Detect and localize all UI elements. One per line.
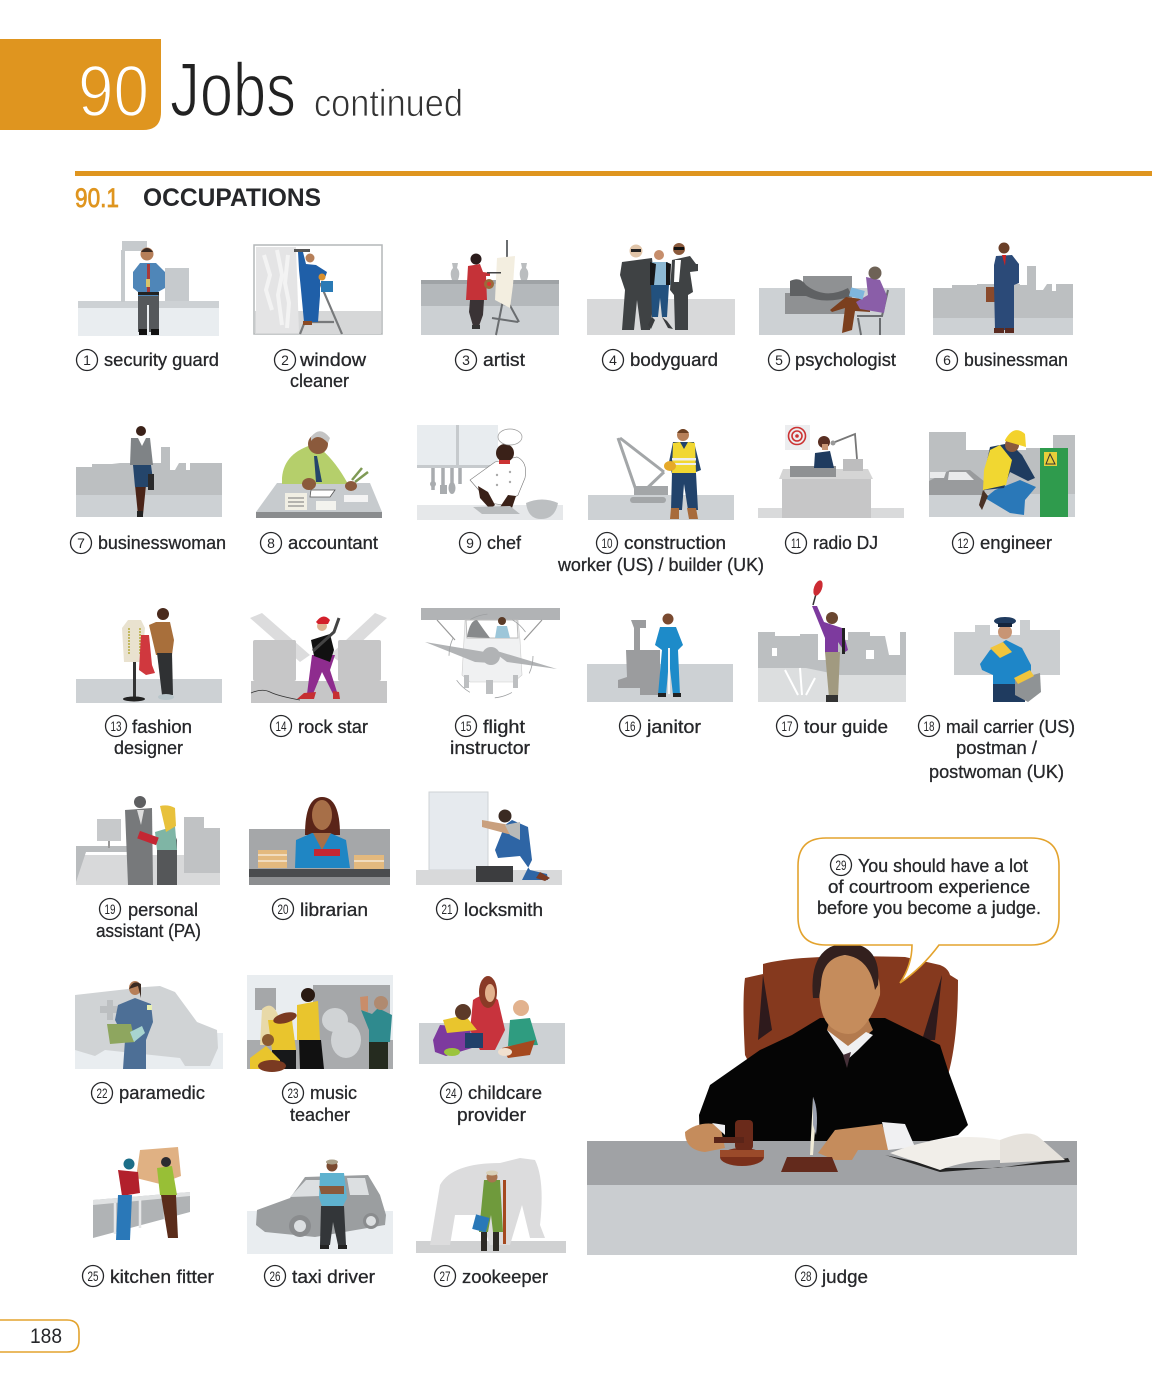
label: childcare provider: childcare: [468, 1082, 542, 1103]
panel: bodyguard: [587, 243, 735, 335]
panel: zookeeper: [416, 1158, 566, 1253]
label: psychologist: 5: [775, 352, 783, 368]
label: librarian: [272, 898, 368, 920]
scene: desk: [587, 1141, 1077, 1255]
icon: green electrical cabinet: [1040, 448, 1068, 517]
figure: designer with mannequin: [122, 608, 174, 702]
panel: childcare provider: [419, 976, 565, 1064]
callout: speech bubble: You should have a lot: [858, 855, 1028, 876]
scene: checkpoint: [78, 241, 219, 336]
icon: on-air sign: [785, 425, 810, 450]
page number: [0, 1320, 79, 1352]
figure: mail carrier: [980, 617, 1041, 702]
figure: students and teacher: [250, 988, 392, 1072]
panel: window cleaner: [254, 245, 382, 334]
label: locksmith: locksmith: [464, 899, 543, 920]
panel: security guard: [78, 241, 219, 336]
label: rock star: [270, 716, 368, 737]
scene: window: [254, 245, 382, 334]
panel: psychologist: [759, 266, 905, 335]
figure: janitor: [655, 614, 683, 697]
panel: tour guide: [758, 579, 906, 702]
label: fashion designer: [106, 716, 192, 758]
panel: mail carrier: [954, 617, 1060, 702]
panel: judge: [587, 943, 1077, 1255]
label: janitor: 16: [624, 718, 636, 734]
label: bodyguard: 4: [609, 352, 617, 368]
label: childcare provider: provider: [457, 1104, 526, 1125]
label: music teacher: 23: [288, 1085, 299, 1101]
figure: cleaner on ladder: [294, 249, 342, 334]
label: chef: chef: [487, 532, 522, 553]
label: tour guide: 17: [782, 718, 793, 734]
label: taxi driver: taxi driver: [292, 1266, 375, 1287]
label: psychologist: psychologist: [795, 349, 896, 370]
panel: locksmith: [416, 792, 562, 885]
label: judge: [796, 1266, 868, 1287]
label: music teacher: teacher: [290, 1104, 350, 1125]
panel: artist: [421, 240, 559, 335]
label: flight instructor: 15: [460, 718, 472, 734]
scene: room and couch: [759, 276, 905, 335]
panel: radio DJ: [758, 425, 904, 518]
label: flight instructor: [450, 716, 530, 758]
label: construction worker: construction: [624, 532, 726, 553]
label: security guard: security guard: [104, 349, 219, 370]
page number: 188: [30, 1325, 62, 1348]
figure: rock star: [297, 616, 340, 699]
scene: floor: [587, 299, 735, 335]
label: flight instructor: instructor: [450, 737, 530, 758]
chapter number tab: 90: [78, 52, 149, 132]
section heading: [75, 171, 1152, 213]
scene: floor: [76, 679, 222, 703]
icon: mixing bowl: [526, 500, 558, 519]
figure: businesswoman: [130, 426, 154, 517]
label: businesswoman: businesswoman: [98, 532, 226, 553]
title: continued: [314, 83, 463, 125]
label: artist: artist: [483, 349, 525, 370]
label: librarian: 20: [278, 901, 289, 917]
label: fashion designer: 13: [110, 718, 122, 734]
label: window cleaner: 2: [281, 352, 289, 368]
label: childcare provider: 24: [446, 1085, 457, 1101]
scene: site with crane: [588, 438, 734, 520]
label: mail carrier: postwoman (UK): [929, 761, 1064, 782]
panel: rock star: [250, 613, 387, 703]
figure: artist at easel: [466, 240, 519, 335]
scene: play mat: [419, 1023, 565, 1064]
papers on desk: [285, 490, 368, 510]
label: judge: judge: [821, 1266, 868, 1287]
panel: chef: [417, 425, 563, 520]
label: librarian: librarian: [300, 899, 368, 920]
figure: aircraft front view: [421, 608, 560, 698]
label: mail carrier: postman /: [956, 737, 1038, 758]
label: kitchen fitter: 25: [88, 1268, 99, 1284]
figure: judge hands and cuffs: [685, 1122, 915, 1160]
label: rock star: rock star: [298, 716, 368, 737]
label: paramedic: 22: [96, 1085, 108, 1101]
scene: studio desk: [758, 459, 904, 518]
figure: zookeeper: [472, 1170, 506, 1251]
label: radio DJ: radio DJ: [813, 532, 878, 553]
figure: client and bodyguards: [620, 243, 698, 330]
figure: tour guide with paddle: [812, 579, 848, 702]
figure: boss and assistant: [125, 796, 177, 885]
scene: stage with amps: [250, 613, 387, 703]
label: artist: [456, 349, 525, 370]
label: radio DJ: [786, 532, 878, 554]
scene: desk: [256, 483, 382, 518]
scene: floor and cleaning cart: [587, 620, 733, 702]
icon: open book: [885, 1133, 1070, 1172]
label: music teacher: [282, 1082, 357, 1125]
scene: skyline: [76, 447, 222, 517]
label: childcare provider: [440, 1082, 542, 1125]
callout: speech bubble: before you become a judge.: [817, 897, 1041, 918]
scene: door: [416, 792, 562, 885]
figure: businessman: [986, 242, 1019, 333]
label: chef: [460, 532, 522, 554]
title: Jobs: [170, 48, 296, 133]
panel: businessman: [933, 242, 1073, 335]
label: paramedic: paramedic: [119, 1082, 205, 1103]
section heading: OCCUPATIONS: [143, 184, 321, 212]
panel: flight instructor: [421, 608, 560, 698]
figure: guard: [133, 248, 165, 335]
callout: speech bubble: of courtroom experience: [828, 876, 1030, 897]
label: taxi driver: 26: [270, 1268, 281, 1284]
label: radio DJ: 11: [791, 535, 801, 551]
panel: kitchen fitter: [93, 1147, 190, 1240]
label: bodyguard: bodyguard: [630, 349, 718, 370]
scene: skyline: [933, 266, 1073, 335]
label: zookeeper: 27: [440, 1268, 451, 1284]
label: mail carrier: [918, 716, 1075, 782]
label: window cleaner: [274, 349, 367, 391]
label: businessman: 6: [943, 352, 951, 368]
figure: fitters with cabinet: [116, 1147, 181, 1240]
scene: kitchen cabinets: [93, 1192, 190, 1238]
panel: taxi driver: [247, 1160, 393, 1254]
scene: music room: [247, 975, 393, 1069]
label: personal assistant: 19: [104, 901, 116, 917]
label: zookeeper: zookeeper: [462, 1266, 548, 1287]
figure: carer and children: [433, 976, 538, 1058]
label: mail carrier: mail carrier (US): [946, 716, 1075, 737]
scene: town silhouette: [954, 620, 1060, 675]
label: janitor: [620, 716, 701, 737]
figure: judge in robe: [699, 943, 968, 1145]
label: construction worker: 10: [602, 535, 613, 551]
figure: locksmith and toolbox: [476, 810, 550, 882]
scene: office: [76, 817, 220, 885]
panel: music teacher: [247, 975, 393, 1072]
label: engineer: engineer: [980, 532, 1052, 553]
callout: speech bubble: 29: [836, 857, 847, 873]
figure: worker: [664, 429, 701, 519]
label: rock star: 14: [276, 718, 287, 734]
figure: chef: [470, 429, 526, 514]
scene: ruins: [758, 632, 906, 702]
label: chef: 9: [466, 535, 474, 551]
callout: speech bubble: [798, 838, 1059, 983]
label: judge: 28: [800, 1268, 812, 1284]
scene: street: [929, 432, 1075, 517]
label: businesswoman: 7: [77, 535, 85, 551]
scene: studio: [421, 263, 559, 335]
figure: paramedic: [107, 981, 153, 1069]
figure: psychologist: [830, 266, 888, 335]
label: flight instructor: flight: [483, 716, 525, 737]
section heading: 90.1: [75, 183, 119, 213]
scene: elephant: [416, 1158, 566, 1253]
scene: ambulance: [75, 986, 223, 1069]
panel: fashion designer: [76, 608, 222, 703]
panel: janitor: [587, 614, 733, 702]
label: fashion designer: designer: [114, 737, 183, 758]
label: window cleaner: cleaner: [290, 370, 349, 391]
label: security guard: 1: [83, 352, 91, 368]
label: construction worker: worker (US) / builder (UK): [557, 554, 764, 575]
scene: shelves: [249, 829, 390, 885]
panel: librarian: [249, 797, 390, 885]
label: janitor: janitor: [646, 716, 701, 737]
label: locksmith: 21: [442, 901, 453, 917]
label: businessman: businessman: [964, 349, 1068, 370]
panel: personal assistant: [76, 796, 220, 885]
label: artist: 3: [462, 352, 470, 368]
icon: pen stand: [781, 1097, 838, 1172]
label: accountant: 8: [267, 535, 275, 551]
figure: DJ with microphone: [814, 434, 857, 468]
figure: driver: [319, 1160, 347, 1249]
label: personal assistant: [96, 898, 201, 941]
panel: construction worker: [588, 429, 734, 520]
scene: kitchen: [417, 425, 563, 520]
title: [170, 48, 463, 133]
label: personal assistant: personal: [128, 899, 198, 920]
label: music teacher: music: [310, 1082, 357, 1103]
label: engineer: 12: [958, 535, 969, 551]
label: construction worker: [557, 532, 764, 575]
label: fashion designer: fashion: [132, 716, 192, 737]
figure: accountant: [282, 431, 368, 491]
figure: librarian: [295, 797, 350, 868]
label: window cleaner: window: [299, 349, 367, 370]
panel: businesswoman: [76, 426, 222, 517]
label: mail carrier: 18: [924, 718, 935, 734]
label: personal assistant: assistant (PA): [96, 920, 201, 941]
panel: engineer: [929, 430, 1075, 517]
scene: chair: [744, 956, 958, 1075]
label: accountant: accountant: [288, 532, 378, 553]
scene: street and taxi: [247, 1175, 393, 1254]
label: tour guide: tour guide: [804, 716, 888, 737]
label: kitchen fitter: kitchen fitter: [110, 1266, 214, 1287]
figure: kneeling engineer: [979, 430, 1036, 515]
panel: paramedic: [75, 981, 223, 1069]
icon: gavel: [714, 1120, 764, 1166]
panel: accountant: [256, 431, 382, 518]
chapter number tab: [0, 39, 161, 132]
